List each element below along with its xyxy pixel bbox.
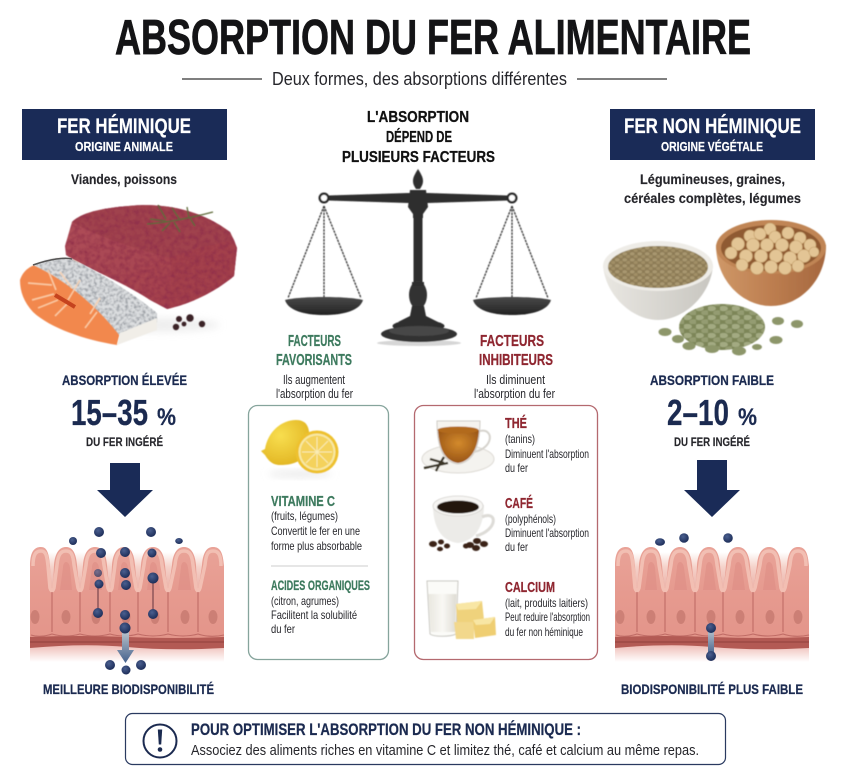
text: calcium: (lait, produits laitiers) [505, 596, 588, 610]
header: fer héminique [22, 109, 227, 160]
header: fer héminique: FER HÉMINIQUE [57, 115, 191, 138]
stat: absorption faible: DU FER INGÉRÉ [674, 434, 750, 449]
panel: favorisants [248, 406, 388, 660]
arrow: down [684, 460, 740, 517]
arrow: down [97, 463, 153, 517]
text: calcium: CALCIUM [505, 580, 555, 596]
icon: lemon [261, 420, 338, 476]
heading: facteurs inhibiteurs: FACTEURS [480, 333, 544, 350]
text: vitamine C: VITAMINE C [271, 494, 335, 510]
text: calcium: Peut reduire l'absorption [505, 610, 590, 624]
text: conseil [191, 720, 699, 759]
text: thé: du fer [505, 461, 528, 475]
text: acides organiques: ACIDES ORGANIQUES [271, 577, 370, 593]
stat: absorption élevée: 15–35 [71, 392, 148, 433]
text: calcium: du fer non héminique [505, 625, 583, 639]
heading: facteurs favorisants: FACTEURS [288, 333, 341, 350]
text: conseil: POUR OPTIMISER L'ABSORPTION DU FER NON HÉMINIQUE : [191, 720, 581, 739]
stat: absorption faible: % [738, 404, 757, 431]
panel: inhibiteurs [414, 406, 598, 660]
text: vitamine C: (fruits, légumes) [271, 509, 338, 523]
text: café: (polyphénols) [505, 512, 556, 526]
text: café: CAFÉ [505, 495, 533, 512]
text: café: Diminuent l'absorption [505, 526, 589, 540]
heading: facteurs: DÉPEND DE [386, 127, 452, 146]
stat: absorption élevée [62, 372, 187, 449]
panel: centre [248, 109, 598, 660]
text: thé: Diminuent l'absorption [505, 447, 589, 461]
caption: meilleure biodisponibilité: MEILLEURE BIODISPONIBILITÉ [43, 681, 214, 697]
subtitle: Deux formes, des absorptions différentes [272, 69, 567, 89]
text: vitamine C [271, 494, 362, 553]
sources: légumineuses: Légumineuses, graines, [640, 171, 785, 187]
text: acides organiques: du fer [271, 622, 295, 636]
heading: facteurs favorisants: FAVORISANTS [276, 352, 352, 369]
text: café [505, 495, 589, 554]
header: fer héminique: ORIGINE ANIMALE [75, 139, 173, 154]
header: fer non héminique [610, 109, 815, 160]
text: vitamine C: Convertit le fer en une [271, 524, 360, 538]
icon: tea cup [422, 421, 494, 473]
heading: facteurs [342, 109, 495, 166]
sources: légumineuses: céréales complètes, légumes [624, 190, 801, 206]
heading: facteurs favorisants: Ils augmentent [283, 372, 345, 387]
text: acides organiques: Facilitent la solubilité [271, 608, 357, 622]
diagram: villi low absorption [615, 533, 809, 662]
heading: facteurs: PLUSIEURS FACTEURS [342, 149, 495, 166]
text: café: du fer [505, 540, 528, 554]
callout: conseil [126, 714, 726, 764]
heading: facteurs inhibiteurs: INHIBITEURS [479, 352, 553, 369]
heading: facteurs inhibiteurs: l'absorption du fer [474, 386, 556, 401]
icon: balance scale [285, 169, 551, 346]
text: acides organiques [271, 577, 370, 636]
icon: meat and salmon [20, 205, 237, 345]
stat: absorption élevée: ABSORPTION ÉLEVÉE [62, 372, 187, 388]
text: thé [505, 415, 589, 475]
text: thé: (tanins) [505, 432, 535, 446]
text: thé: THÉ [505, 415, 527, 432]
diagram: villi high absorption [30, 527, 224, 674]
header: fer non héminique: ORIGINE VÉGÉTALE [661, 139, 763, 154]
stat: absorption faible [650, 372, 774, 449]
panel: fer non héminique [603, 109, 826, 697]
sources: viandes, poissons: Viandes, poissons [71, 171, 177, 187]
caption: biodisponibilité plus faible: BIODISPONIBILITÉ PLUS FAIBLE [621, 681, 803, 697]
icon: legumes in bowls [603, 220, 826, 356]
text: acides organiques: (citron, agrumes) [271, 594, 339, 608]
header: fer non héminique: FER NON HÉMINIQUE [624, 115, 801, 138]
heading: facteurs inhibiteurs: Ils diminuent [486, 372, 545, 387]
icon: milk and butter [427, 581, 496, 639]
heading: facteurs favorisants: l'absorption du fer [276, 386, 353, 401]
sources: légumineuses [624, 171, 801, 206]
heading: facteurs: L'ABSORPTION [367, 109, 469, 126]
stat: absorption élevée: % [157, 404, 176, 431]
stat: absorption faible: 2–10 [667, 392, 729, 433]
text: vitamine C: forme plus absorbable [271, 539, 362, 553]
text: conseil: Associez des aliments riches en vitamine C et limitez thé, café et calcium au même repas. [191, 742, 699, 759]
heading: facteurs favorisants [276, 333, 353, 401]
icon: exclamation [144, 724, 176, 758]
icon: coffee cup [429, 496, 493, 551]
stat: absorption faible: ABSORPTION FAIBLE [650, 372, 774, 388]
panel: fer héminique [20, 109, 237, 697]
heading: facteurs inhibiteurs [474, 333, 556, 401]
stat: absorption élevée: DU FER INGÉRÉ [86, 434, 163, 449]
text: calcium [505, 580, 590, 639]
